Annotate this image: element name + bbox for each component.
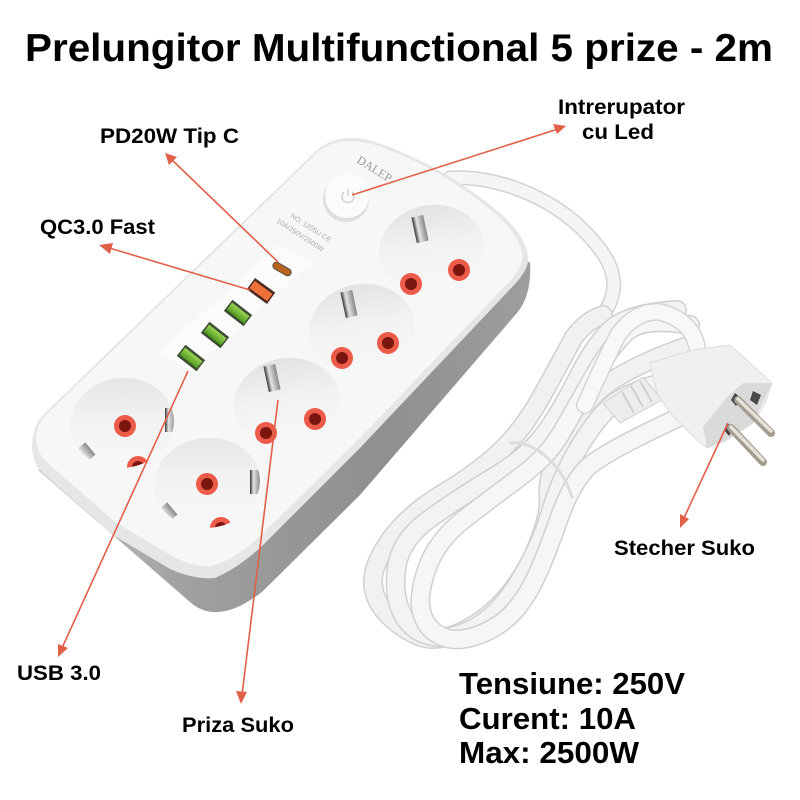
label: switch: Intrerupator <box>558 96 685 119</box>
specifications <box>459 666 685 770</box>
socket 5 <box>159 438 260 528</box>
arrow: power switch <box>352 124 566 195</box>
socket 2 <box>302 275 422 383</box>
power switch <box>323 174 369 222</box>
label: USB 3.0: USB 3.0 <box>17 662 101 685</box>
strip gray side <box>38 262 530 612</box>
specifications: Tensiune: 250V <box>459 666 685 701</box>
plug face <box>703 383 772 448</box>
arrow: PD20W Tip C <box>165 153 278 262</box>
arrow: USB 3.0 <box>58 371 188 657</box>
title: Prelungitor Multifunctional 5 prize - 2m <box>25 27 773 70</box>
arrow: Priza Suko <box>236 400 278 704</box>
label: QC3.0 Fast: QC3.0 Fast <box>40 216 155 239</box>
cable from strip to coil <box>450 178 614 315</box>
socket 3 <box>227 349 347 457</box>
label: PD20W Tip C: PD20W Tip C <box>100 125 239 148</box>
coil strand 1 <box>373 315 690 639</box>
label: Priza Suko: Priza Suko <box>182 714 294 737</box>
power cable with coils <box>373 178 698 639</box>
plug body <box>650 345 772 448</box>
USB port 2 <box>201 322 229 348</box>
arrow: Stecher Suko <box>680 423 728 528</box>
label: switch <box>558 96 685 144</box>
label: Stecher Suko: Stecher Suko <box>614 537 755 560</box>
coil strand 2 <box>396 310 690 637</box>
coil top arc <box>585 312 698 405</box>
strain relief <box>603 377 662 423</box>
strip white top face <box>36 141 522 566</box>
rating text: 10A/250V/2500W <box>275 218 325 254</box>
QC3.0 port <box>247 278 275 304</box>
socket 4 <box>75 378 174 468</box>
socket 1 <box>372 196 492 304</box>
power strip <box>32 138 530 612</box>
specifications: Max: 2500W <box>459 735 640 770</box>
USB port 1 <box>224 300 252 326</box>
USB-C port <box>272 261 292 277</box>
arrow: QC3.0 Fast <box>99 243 250 290</box>
specifications: Curent: 10A <box>459 701 636 736</box>
plug <box>603 345 772 462</box>
pin sockets <box>724 393 742 436</box>
label: switch: cu Led <box>582 121 654 144</box>
USB port 3 <box>177 345 205 371</box>
cable tie <box>511 443 572 497</box>
plug pins <box>731 399 771 462</box>
rating text: NO: 1205U CE <box>289 213 332 244</box>
ground contact <box>750 391 761 405</box>
port panel <box>160 245 312 372</box>
strip white rim <box>32 138 528 578</box>
coil strand 3 <box>420 322 695 639</box>
brand: DALEP <box>354 153 395 185</box>
